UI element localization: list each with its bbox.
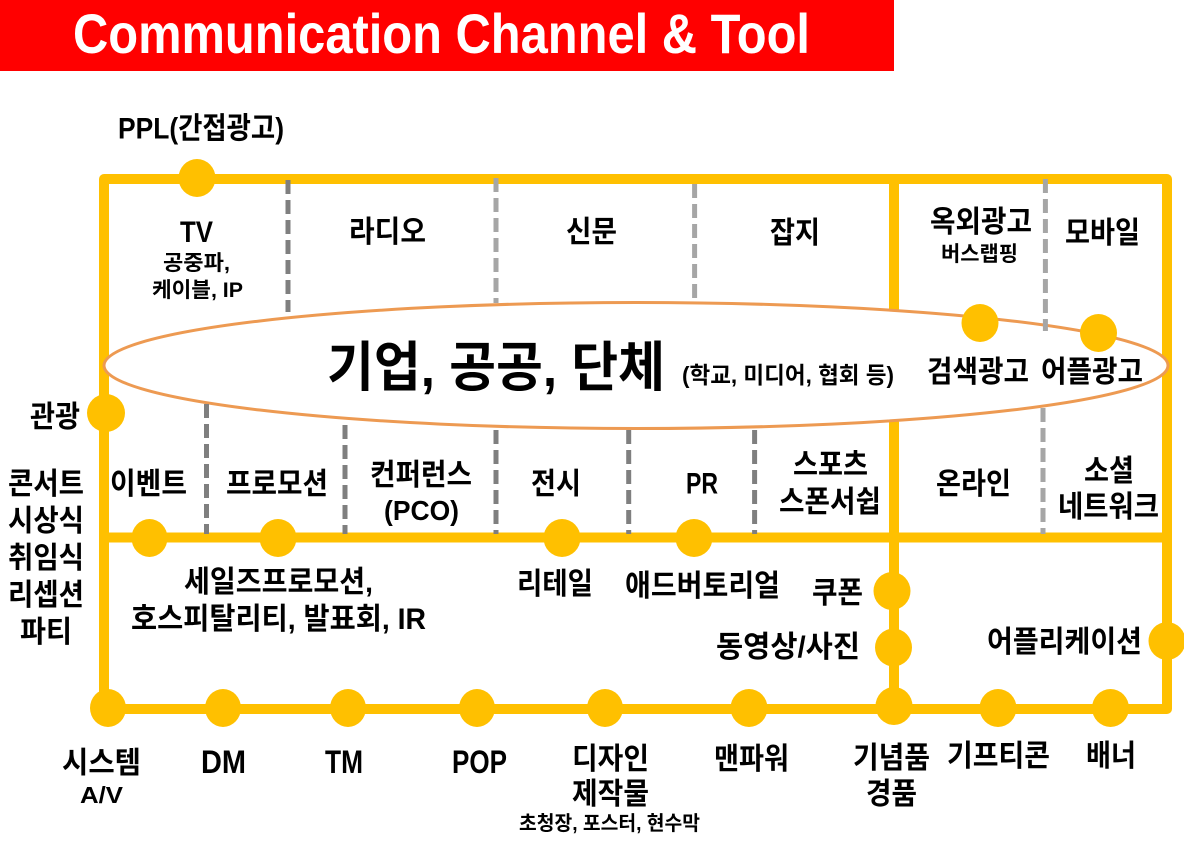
label: retail: 리테일 [517,568,593,601]
label: souvenirs and gifts: 경품 [866,778,917,811]
label: conference: 컨퍼런스 [370,459,472,492]
label: mobile: 모바일 [1065,217,1140,250]
label: TV: 공중파, [163,252,230,275]
label: TV: 케이블, IP [152,279,243,302]
label: system: 시스템 [62,747,141,780]
left event list: 취임식 [8,542,84,575]
label: app ads: 어플광고 [1041,356,1143,389]
label: video and photo: 동영상/사진 [716,631,860,664]
left event list: 파티 [20,616,72,649]
left event list: 시상식 [8,505,84,538]
label: application: 어플리케이션 [987,626,1142,659]
label: search ads: 검색광고 [927,356,1029,389]
label: souvenirs and gifts: 기념품 [853,742,930,775]
label: social network [1058,455,1159,524]
label: sales promotion: 호스피탈리티, 발표회, IR [131,603,426,636]
label: sales promotion [131,566,426,636]
label: sports sponsorship: 스포츠 [793,449,868,482]
label: social network: 소셜 [1084,455,1134,488]
label: design materials: 제작물 [572,778,649,811]
label: conference: (PCO) [384,495,459,526]
label: souvenirs and gifts [853,742,930,811]
label: TM: TM [325,744,363,780]
label: sales promotion: 세일즈프로모션, [184,566,373,599]
label: TV: TV [180,216,213,249]
label: sports sponsorship [779,449,881,519]
label: event: 이벤트 [110,468,187,501]
label: PPL: PPL(간접광고) [118,112,284,146]
label: outdoor advertising [930,206,1032,266]
label: POP: POP [452,744,507,780]
left event list: 리셉션 [8,579,84,612]
ellipse heading: 기업, 공공, 단체 [327,338,665,398]
label: manpower: 맨파워 [714,743,789,776]
label: promotion: 프로모션 [226,468,328,501]
label: design materials [519,743,700,835]
diagram frame lines [104,179,1167,709]
label: TV [152,216,243,302]
title banner: Communication Channel & Tool [73,2,810,65]
label: conference [370,459,472,526]
label: radio: 라디오 [349,216,426,249]
left event list: 콘서트 [8,468,84,501]
label: design materials: 디자인 [572,743,649,776]
label: social network: 네트워크 [1058,491,1159,524]
label: system: A/V [80,782,124,808]
label: exhibition: 전시 [531,468,581,501]
label: DM: DM [201,744,246,780]
label: magazine: 잡지 [770,217,820,250]
label: design materials: 초청장, 포스터, 현수막 [519,812,700,835]
label: online: 온라인 [936,468,1011,501]
central ellipse [104,302,1168,428]
ellipse subheading: (학교, 미디어, 협회 등) [682,362,894,388]
label: PR: PR [686,468,718,500]
label: tourism: 관광 [30,401,80,434]
label: newspaper: 신문 [566,216,617,249]
label: advertorial: 애드버토리얼 [625,570,780,603]
label: coupon: 쿠폰 [812,577,863,610]
label: system [62,747,141,808]
label: gifticon: 기프티콘 [947,740,1050,773]
connection dots [87,159,1184,727]
label: outdoor advertising: 옥외광고 [930,206,1032,239]
label: sports sponsorship: 스폰서쉽 [779,486,881,519]
label: banner: 배너 [1086,740,1136,773]
label: outdoor advertising: 버스랩핑 [941,243,1018,266]
left event list [8,468,84,649]
